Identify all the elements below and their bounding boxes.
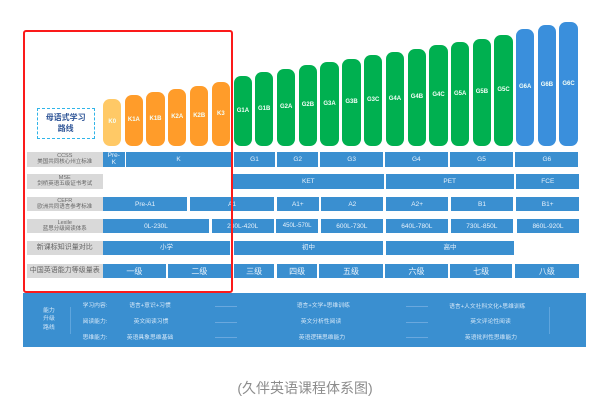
cell: 0L-230L: 0L-230L (144, 223, 168, 230)
bar G6A: G6A (519, 84, 531, 90)
heading: ability upgrade path (43, 307, 55, 331)
cell: G1 (234, 152, 275, 167)
bar G4A: G4A (389, 96, 401, 102)
stage 2 thinking: 英语逻辑思维能力 (299, 335, 345, 341)
cell: B1+ (516, 197, 579, 211)
cell: PET (386, 174, 514, 189)
dashed box: native-style learning path (37, 108, 95, 139)
connector lines 2 (406, 306, 428, 338)
cell: A2: A2 (348, 201, 356, 208)
cell: junior high: 初中 (302, 244, 315, 251)
row label: MSE: MSE (59, 175, 71, 181)
caption: (久伴英语课程体系图) (237, 380, 373, 396)
cell: 230L-420L: 230L-420L (227, 223, 258, 230)
heading: ability upgrade path: 能力 (43, 308, 55, 314)
cell: junior high (234, 241, 383, 255)
row: MSE (27, 174, 579, 189)
row label: CEFR: CEFR (57, 198, 72, 204)
row label: CEFR: 欧洲共同语言参考标准 (37, 204, 92, 210)
cell: Pre-K: K (112, 159, 116, 166)
cell: Pre-A1: Pre-A1 (135, 201, 155, 208)
row label: China English scale: 中国英语能力等级量表 (30, 267, 100, 274)
row: Lexile (27, 219, 579, 233)
row label: MSE: 剑桥英语五级证书考试 (37, 181, 92, 187)
row label: Lexile (27, 219, 102, 233)
cell: G2 (277, 152, 318, 167)
bar K2B: K2B (193, 113, 205, 119)
cell: G6: G6 (542, 156, 551, 163)
cell: K (126, 152, 231, 167)
bar K0 (103, 99, 121, 146)
label: thinking ability: 思维能力: (83, 335, 107, 341)
bar G6A (516, 29, 534, 146)
cell: level 2: 二级 (191, 267, 207, 276)
stage 3 thinking: 英语批判性思维能力 (465, 335, 517, 341)
dashed box: native-style learning path: 路线 (58, 124, 74, 133)
cell: B1 (451, 197, 513, 211)
cell: B1: B1 (478, 201, 486, 208)
bar K1A: K1A (128, 117, 140, 123)
cell: A1+ (277, 197, 319, 211)
bar G2B (299, 65, 317, 146)
bar K3 (212, 82, 230, 146)
row label: Lexile: Lexile (58, 220, 72, 226)
cell: 600L-730L (321, 219, 383, 233)
dashed box: native-style learning path: 母语式学习 (46, 113, 86, 122)
cell: level 6: 六级 (408, 267, 424, 276)
cell: A2 (321, 197, 383, 211)
bar G6B (538, 25, 556, 146)
cell: level 8: 八级 (539, 267, 555, 276)
cell: B1+: B1+ (542, 201, 554, 208)
bar G3A: G3A (323, 101, 336, 107)
cell: level 4 (277, 264, 317, 278)
cell: 0L-230L (103, 219, 209, 233)
bar G4C (429, 45, 448, 146)
stage 1 reading: 英文阅读习惯 (134, 319, 168, 325)
cell: senior high (386, 241, 514, 255)
cell: level 2 (168, 264, 231, 278)
row label: Lexile: 蓝思分级阅读体系 (43, 226, 87, 232)
bar G3B (342, 59, 361, 146)
cell: level 1 (103, 264, 166, 278)
row: CEFR (27, 197, 579, 211)
bar G2B: G2B (302, 102, 314, 108)
cell: Pre-K: Pre- (108, 152, 120, 159)
stage 1 thinking: 英语具象思维基础 (127, 335, 173, 341)
row: CCSS (27, 152, 578, 167)
cell: level 7 (450, 264, 512, 278)
cell: level 6 (385, 264, 448, 278)
cell: PET: PET (443, 178, 456, 185)
cell: level 7: 七级 (473, 267, 489, 276)
cell: G3: G3 (347, 156, 356, 163)
cell: level 3 (234, 264, 274, 278)
bar G2A: G2A (280, 104, 292, 110)
bar G5B: G5B (476, 89, 488, 95)
bar K2B (190, 86, 208, 146)
bar K1A (125, 95, 143, 146)
cell: FCE: FCE (541, 178, 554, 185)
bar G3B: G3B (345, 99, 358, 105)
row label: new curriculum vocabulary (27, 241, 102, 255)
cell: level 8 (515, 264, 579, 278)
stage 3 reading: 英文评论性阅读 (470, 319, 511, 325)
bar G5B (473, 39, 491, 146)
row label: CCSS (27, 152, 102, 167)
row label: new curriculum vocabulary: 新课标知识量对比 (37, 244, 93, 251)
bar G2A (277, 69, 295, 146)
chart: course level bars (103, 22, 578, 146)
cell: Pre-A1 (103, 197, 187, 211)
bar G6B: G6B (541, 82, 553, 88)
divider right (549, 307, 550, 334)
cell: G6 (515, 152, 578, 167)
cell: 730L-850L: 730L-850L (466, 223, 497, 230)
bar K1B (146, 92, 165, 146)
cell: 450L-570L (276, 219, 318, 233)
cell: primary school: 小学 (160, 244, 173, 251)
bar G5A: G5A (454, 91, 466, 97)
heading: ability upgrade path: 路线 (43, 325, 55, 331)
row label: MSE (27, 174, 102, 189)
stage 2 reading: 英文分析性阅读 (301, 319, 341, 325)
bar G1B (255, 72, 273, 146)
cell: 730L-850L (451, 219, 513, 233)
bar G4A (386, 52, 404, 146)
row label: China English scale (27, 264, 102, 278)
bar G5C (494, 35, 513, 146)
cell: G4 (385, 152, 448, 167)
bar G1A: G1A (237, 108, 249, 114)
row label: CCSS: 美国共同核心州立标准 (37, 159, 92, 165)
cell: level 5: 五级 (343, 267, 359, 276)
bar G4C: G4C (432, 92, 445, 98)
panel: ability upgrade path (23, 293, 586, 347)
bar G3A (320, 62, 339, 146)
cell: G4: G4 (412, 156, 421, 163)
cell: A1 (190, 197, 274, 211)
bar G3C: G3C (367, 97, 379, 103)
cell: 450L-570L: 450L-570L (283, 223, 311, 229)
bar G5A (451, 42, 469, 146)
row label: CEFR (27, 197, 102, 211)
cell: level 4: 四级 (289, 267, 305, 276)
cell: FCE (516, 174, 579, 189)
stage 3 content: 语言+人文社科文化+思维训练 (449, 304, 525, 310)
bar K1B: K1B (149, 116, 162, 122)
bar G6C (559, 22, 578, 146)
bar K0: K0 (108, 119, 116, 125)
bar G1B: G1B (258, 106, 270, 112)
connector lines 1 (215, 306, 237, 338)
cell: 640L-780L (386, 219, 448, 233)
bar G5C: G5C (497, 87, 510, 93)
row: school vocabulary comparison (27, 241, 514, 255)
bar K2A: K2A (171, 114, 183, 120)
label: reading ability: 阅读能力: (83, 319, 107, 325)
cell: level 3: 三级 (246, 267, 262, 276)
cell: G1: G1 (250, 156, 259, 163)
cell: 860L-920L (517, 219, 579, 233)
divider (70, 307, 71, 334)
cell: 640L-780L: 640L-780L (401, 223, 432, 230)
bar K2A (168, 89, 186, 146)
red highlight frame (23, 30, 233, 293)
bar K3: K3 (217, 111, 225, 117)
cell: A1+: A1+ (292, 201, 304, 208)
bar G4B (408, 49, 426, 146)
cell: G5: G5 (477, 156, 486, 163)
cell: senior high: 高中 (443, 244, 456, 251)
cell: K: K (176, 156, 181, 163)
cell: level 5 (319, 264, 383, 278)
cell: Pre-K (103, 152, 124, 167)
cell: A2+: A2+ (411, 201, 423, 208)
cell: A1: A1 (228, 201, 236, 208)
cell: A2+ (386, 197, 448, 211)
bar G4B: G4B (411, 94, 423, 100)
bar G3C (364, 55, 382, 146)
cell: 600L-730L: 600L-730L (336, 223, 367, 230)
cell: G5 (450, 152, 513, 167)
heading: ability upgrade path: 升级 (43, 316, 55, 322)
cell: KET (233, 174, 384, 189)
row label: CCSS: CCSS (57, 153, 72, 159)
cell: 230L-420L (212, 219, 274, 233)
bar G1A (234, 76, 252, 146)
cell: KET: KET (302, 178, 315, 185)
label: learning content: 学习内容: (83, 303, 107, 309)
cell: G2: G2 (293, 156, 302, 163)
cell: G3 (320, 152, 383, 167)
bar G6C: G6C (562, 81, 575, 87)
stage 1 content: 语言+意识+习惯 (129, 303, 171, 309)
cell: 860L-920L: 860L-920L (532, 223, 564, 230)
row: China English proficiency scale (27, 264, 579, 278)
stage 2 content: 语言+文学+思维训练 (297, 303, 350, 309)
cell: level 1: 一级 (126, 267, 142, 276)
cell: primary school (103, 241, 230, 255)
